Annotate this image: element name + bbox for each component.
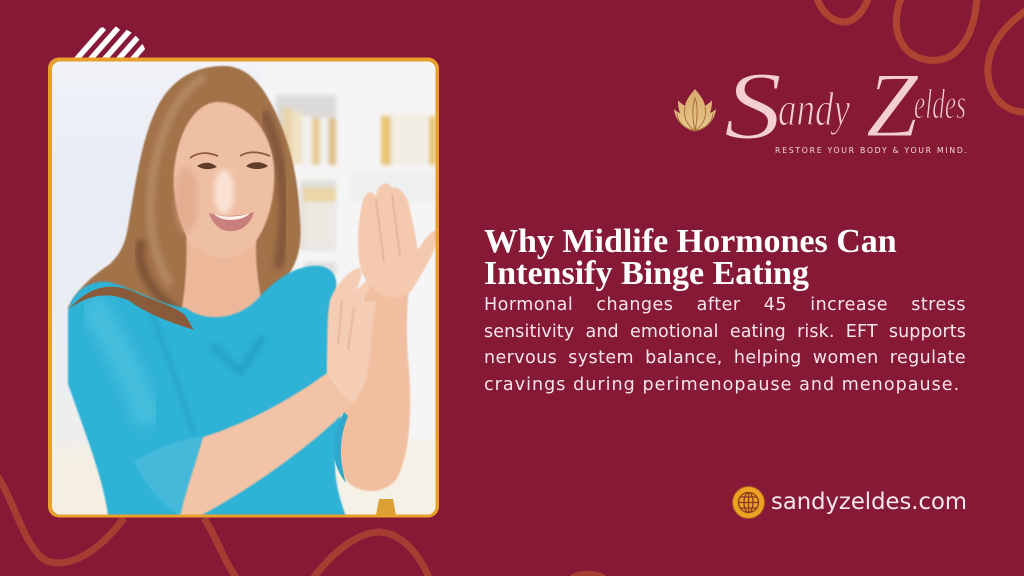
front hand [327,268,376,404]
title: Intensify Binge Eating [484,255,809,292]
logo: script wordmark [724,52,966,159]
photo background: room [51,60,442,520]
hair lock over sweater [70,287,194,330]
body text: Hormonal changes after 45 increase stress [484,295,966,315]
body text: sensitivity and emotional eating risk. EFT supports [484,322,966,342]
logo: script wordmark: andy [778,83,851,136]
eyebrows [190,152,270,158]
title: Why Midlife Hormones Can [484,223,897,260]
eyes [197,162,268,169]
logo: lotus icon [674,89,716,131]
back hand [358,183,436,297]
body text: cravings during perimenopause and menopause. [484,375,960,395]
logo: script wordmark: Z [866,54,919,156]
title [484,223,897,292]
website globe icon [732,486,764,518]
body text: nervous system balance, helping women regulate [484,348,966,368]
mouth [209,212,254,231]
face [174,102,274,258]
logo: script wordmark: S [724,52,782,159]
back sleeve [334,412,348,483]
lamp base [376,499,396,515]
bookshelves [276,95,438,276]
body text [484,295,966,395]
back arm [338,280,410,491]
decorative curves: bottom [0,474,604,576]
logo: tagline: RESTORE YOUR BODY & YOUR MIND. [775,146,967,155]
sleeve cuff [134,437,203,516]
decorative curves: top right [816,0,1024,112]
hair [67,66,301,328]
striped circle accent [74,26,145,58]
sweater [68,266,346,516]
website url: sandyzeldes.com [771,489,967,515]
photo frame with woman [48,58,442,520]
neck and chest [181,234,261,318]
logo: script wordmark: eldes [914,82,966,128]
forearm [180,373,352,516]
face shading [174,166,198,234]
